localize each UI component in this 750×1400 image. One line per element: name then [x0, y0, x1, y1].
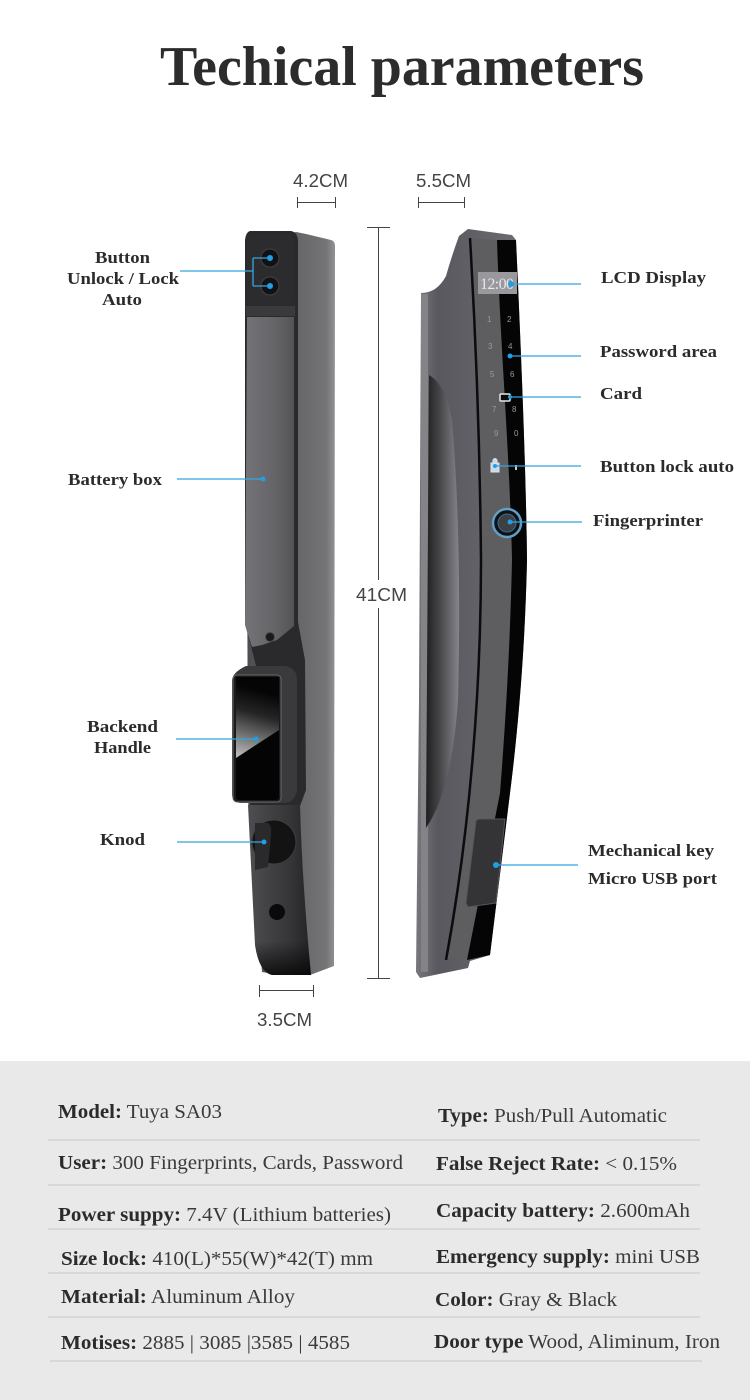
label: Battery box: Battery box [68, 470, 163, 489]
label: Backend Handle: Backend [87, 717, 159, 736]
button: lower [261, 277, 279, 295]
keypad numbers: 1 [487, 315, 492, 324]
keypad numbers: 8 [512, 405, 517, 414]
LCD time: 12:00 [480, 276, 514, 293]
dimension: 41CM [352, 228, 407, 978]
label: LCD Display [508, 268, 707, 287]
front panel grey [447, 238, 512, 958]
label: Fingerprinter [508, 511, 703, 530]
spec: type: Type: Push/Pull Automatic [438, 1105, 667, 1127]
frame band under button panel [246, 306, 295, 316]
panel: specifications [0, 1061, 750, 1400]
dimension: 5.5CM: 5.5CM [416, 171, 471, 191]
keypad numbers: 3 [488, 342, 493, 351]
title: Techical parameters [160, 36, 644, 98]
handle recess [426, 375, 459, 828]
spec: color: Color: Gray & Black [435, 1289, 617, 1311]
spec: material: Material: Aluminum Alloy [61, 1286, 295, 1308]
groove line [446, 238, 481, 960]
auto lock marker [515, 465, 517, 470]
label: Button Unlock / Lock Auto: Auto [102, 290, 142, 309]
label: Button Unlock / Lock Auto [67, 248, 273, 309]
keypad numbers: 0 [514, 429, 519, 438]
keypad numbers: 9 [494, 429, 499, 438]
spec: power supply: Power suppy: 7.4V (Lithium batteries) [58, 1204, 391, 1226]
dimension: 3.5CM [257, 985, 314, 1030]
spec: model: Model: Tuya SA03 [58, 1101, 222, 1123]
screw [266, 632, 274, 642]
lock icon [491, 458, 499, 472]
keypad numbers [487, 315, 519, 438]
key hole [269, 904, 285, 920]
keypad numbers: 4 [508, 342, 513, 351]
back view of lock [232, 231, 335, 975]
mechanical key cover [466, 819, 505, 907]
label: Knod [100, 830, 266, 849]
labels and leader lines: front view [493, 268, 734, 888]
spec: motises: Motises: 2885 | 3085 |3585 | 4585 [61, 1332, 350, 1354]
dimension: 4.2CM [293, 171, 348, 208]
button panel [247, 234, 293, 305]
handle body [232, 666, 297, 803]
spec: emergency supply: Emergency supply: mini USB [436, 1246, 700, 1268]
label: Button Unlock / Lock Auto: Button [95, 248, 151, 267]
spec: false reject rate: False Reject Rate: < 0.15% [436, 1153, 677, 1175]
body silhouette [416, 229, 527, 978]
label: Button lock auto: Button lock auto [600, 457, 734, 476]
keypad numbers: 6 [510, 370, 515, 379]
left edge highlight [421, 294, 428, 972]
keypad numbers: 2 [507, 315, 512, 324]
spec: size lock: Size lock: 410(L)*55(W)*42(T) mm [61, 1248, 373, 1270]
label: Battery box [68, 470, 266, 489]
dimension: 41CM: 41CM [356, 585, 407, 605]
front face frame [245, 231, 306, 806]
label: Knod: Knod [100, 830, 146, 849]
label: Password area [508, 342, 718, 361]
label: Mechanical key / Micro USB port: Mechanical key [588, 841, 715, 860]
black strip [467, 240, 527, 960]
dimension: 4.2CM: 4.2CM [293, 171, 348, 191]
label: Card [508, 384, 643, 403]
handle glass [233, 675, 281, 802]
LCD screen [478, 272, 517, 294]
dimension: 3.5CM: 3.5CM [257, 1010, 312, 1030]
knob [252, 820, 296, 864]
spec: user: User: 300 Fingerprints, Cards, Password [58, 1152, 403, 1174]
front view of lock [416, 229, 527, 978]
label: LCD Display: LCD Display [601, 268, 707, 287]
lower plate [248, 805, 311, 975]
label: Backend Handle [87, 717, 258, 757]
spec: door type: Door type Wood, Aliminum, Iron [434, 1331, 720, 1353]
label: Backend Handle: Handle [94, 738, 151, 757]
battery box [245, 317, 294, 647]
label: Fingerprinter: Fingerprinter [593, 511, 703, 530]
label: Mechanical key / Micro USB port: Micro USB port [588, 869, 717, 888]
label: Button Unlock / Lock Auto: Unlock / Lock [67, 269, 180, 288]
dimension: 5.5CM [416, 171, 471, 208]
label: Button lock auto [493, 457, 734, 476]
plate bottom shade [248, 805, 311, 975]
spec: capacity battery: Capacity battery: 2.600mAh [436, 1200, 690, 1222]
fingerprint sensor [493, 509, 521, 537]
button: upper [261, 249, 279, 267]
side face [246, 232, 335, 975]
card icon [500, 394, 510, 401]
label: Mechanical key / Micro USB port [493, 841, 717, 888]
label: Password area: Password area [600, 342, 718, 361]
label: Card: Card [600, 384, 643, 403]
keypad numbers: 5 [490, 370, 495, 379]
keypad numbers: 7 [492, 405, 497, 414]
labels and leader lines: back view [67, 248, 273, 849]
